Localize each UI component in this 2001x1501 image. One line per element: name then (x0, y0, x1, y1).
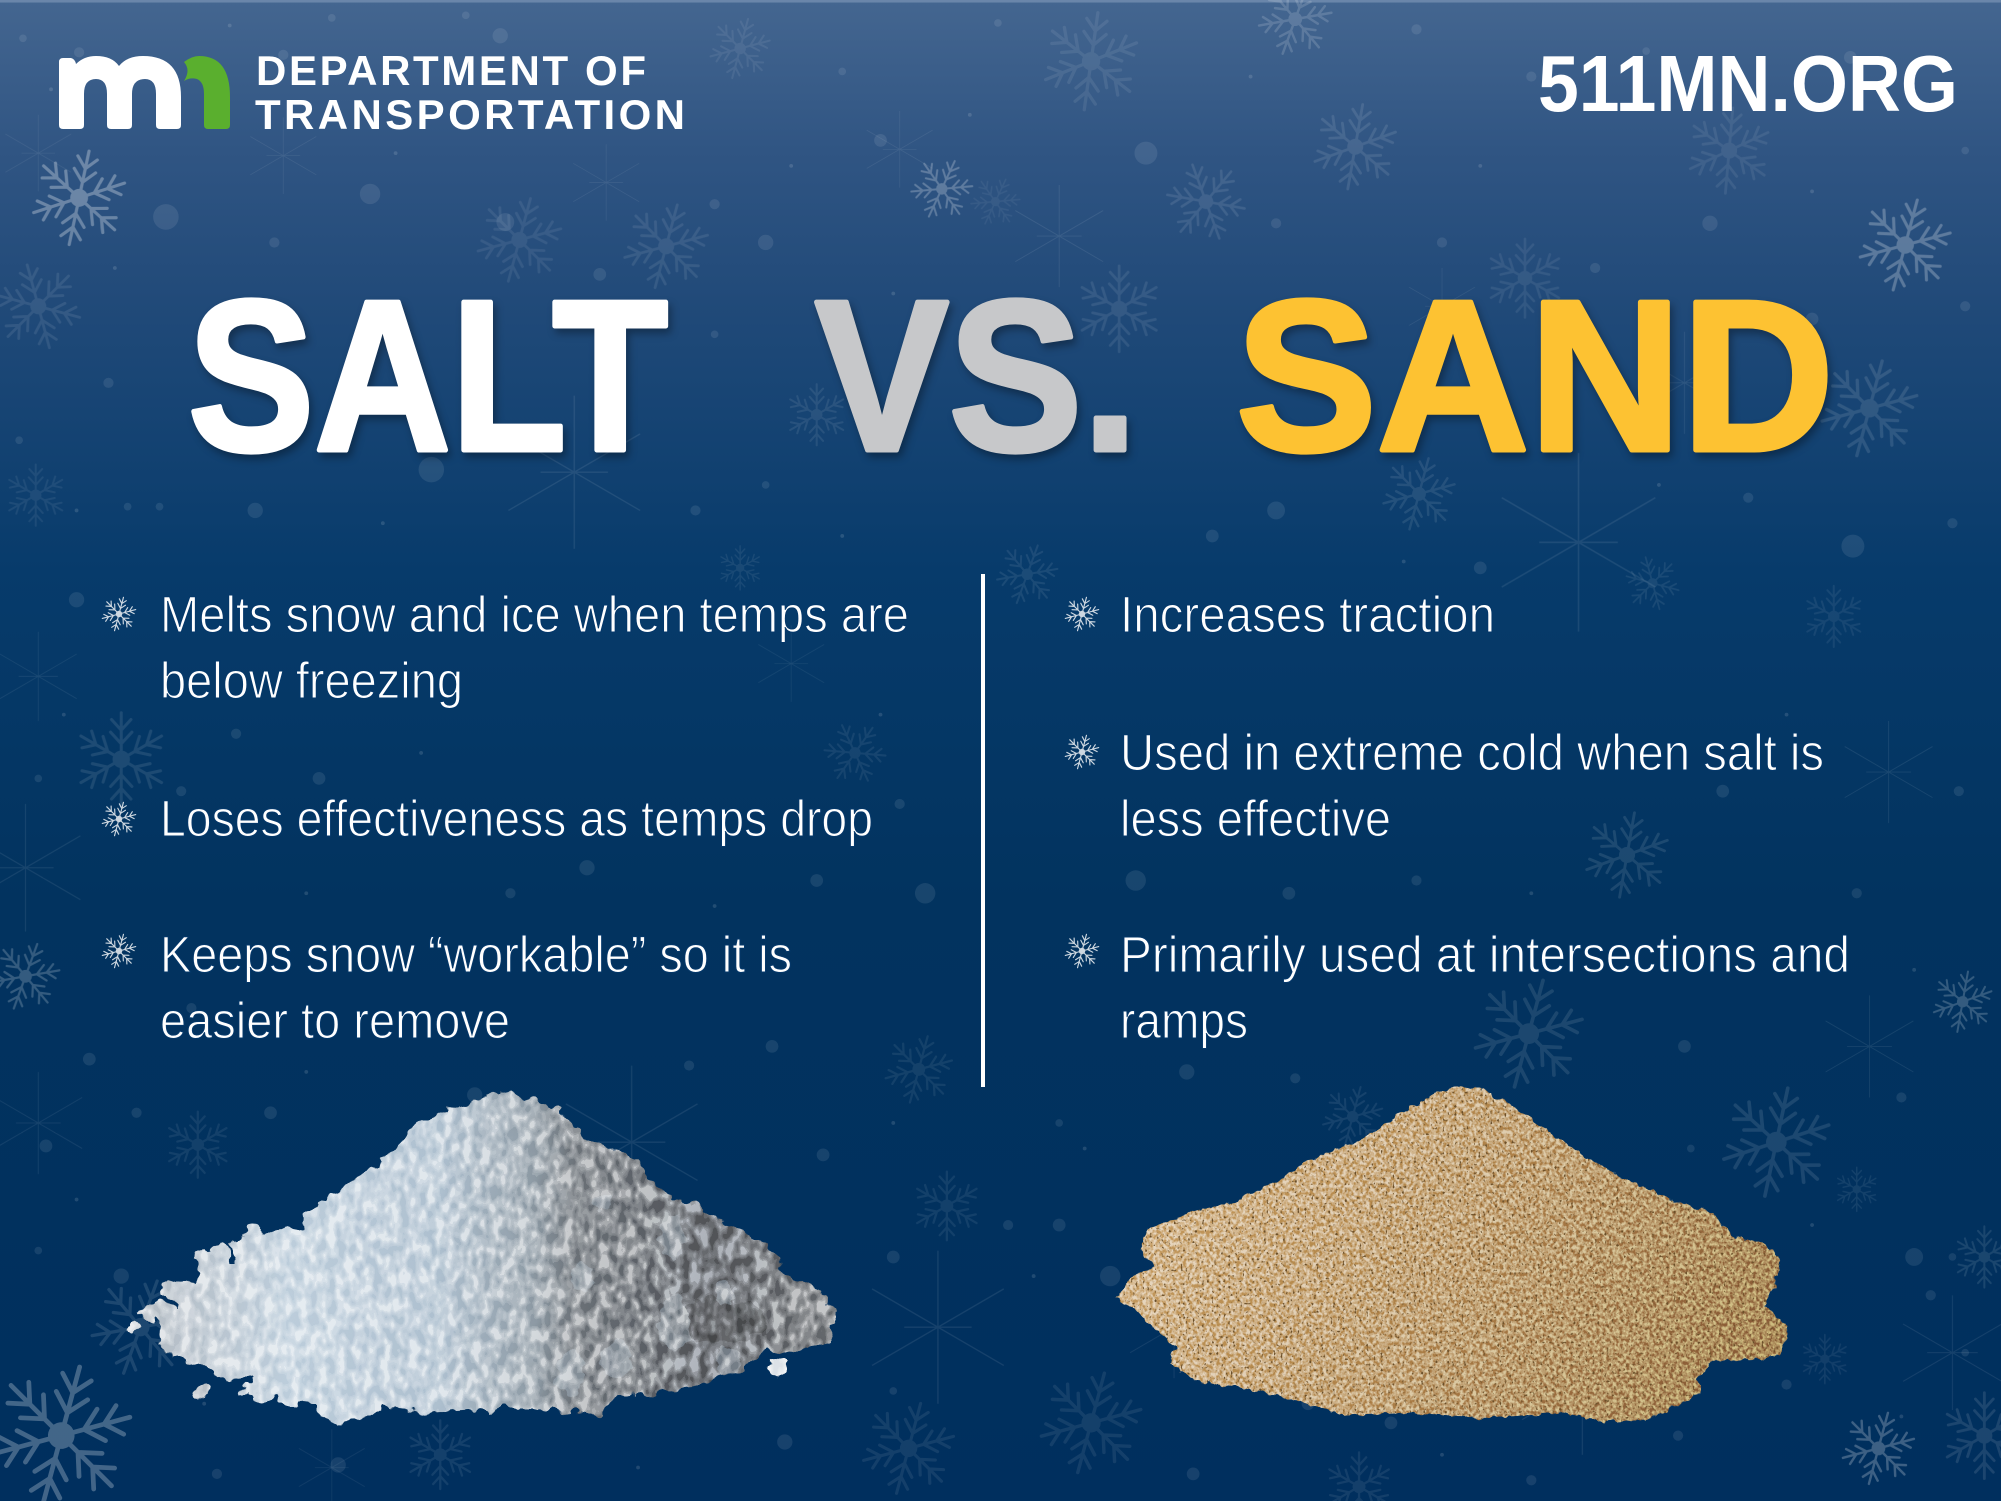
text: keeps snow workable: easier to remove (160, 992, 510, 1049)
text: used in extreme cold: less effective (1120, 790, 1391, 847)
icon: green n of logo (184, 56, 230, 129)
illustration: salt pile (128, 1088, 835, 1424)
text: keeps snow workable: Keeps snow “workable” so it is (160, 926, 792, 983)
center divider line (981, 574, 985, 1087)
title word: sand: SAND (1236, 255, 1834, 496)
title word: vs.: VS. (815, 255, 1138, 496)
logo: MnDOT mark and department name (59, 47, 685, 138)
illustration: sand pile (1116, 1085, 1789, 1422)
text: primarily used at intersections: ramps (1120, 992, 1248, 1049)
bullet icon: snowflake (1061, 593, 1103, 635)
text: transportation: TRANSPORTATION (255, 91, 685, 138)
bullet icon: snowflake (1061, 731, 1103, 773)
bullet icon: snowflake (98, 798, 140, 840)
text: used in extreme cold: Used in extreme cold when salt is (1120, 724, 1824, 781)
text: melts snow and ice: below freezing (160, 652, 463, 709)
bullet icon: snowflake (98, 593, 140, 635)
title word: salt: SALT (188, 255, 668, 496)
text: increases traction: Increases traction (1120, 586, 1495, 643)
text: department of: DEPARTMENT OF (256, 47, 646, 94)
text: melts snow and ice: Melts snow and ice when temps are (160, 586, 909, 643)
text: loses effectiveness: Loses effectiveness as temps drop (160, 790, 873, 847)
text: primarily used at intersections: Primarily used at intersections and (1120, 926, 1850, 983)
panel: sand facts (1061, 586, 1850, 1049)
bullet icon: snowflake (98, 930, 140, 972)
website address: 511MN.ORG (1538, 39, 1958, 128)
bullet icon: snowflake (1061, 930, 1103, 972)
title: salt vs. sand (188, 255, 1834, 496)
panel: salt facts (98, 586, 909, 1049)
icon: m letter of logo (59, 56, 181, 129)
